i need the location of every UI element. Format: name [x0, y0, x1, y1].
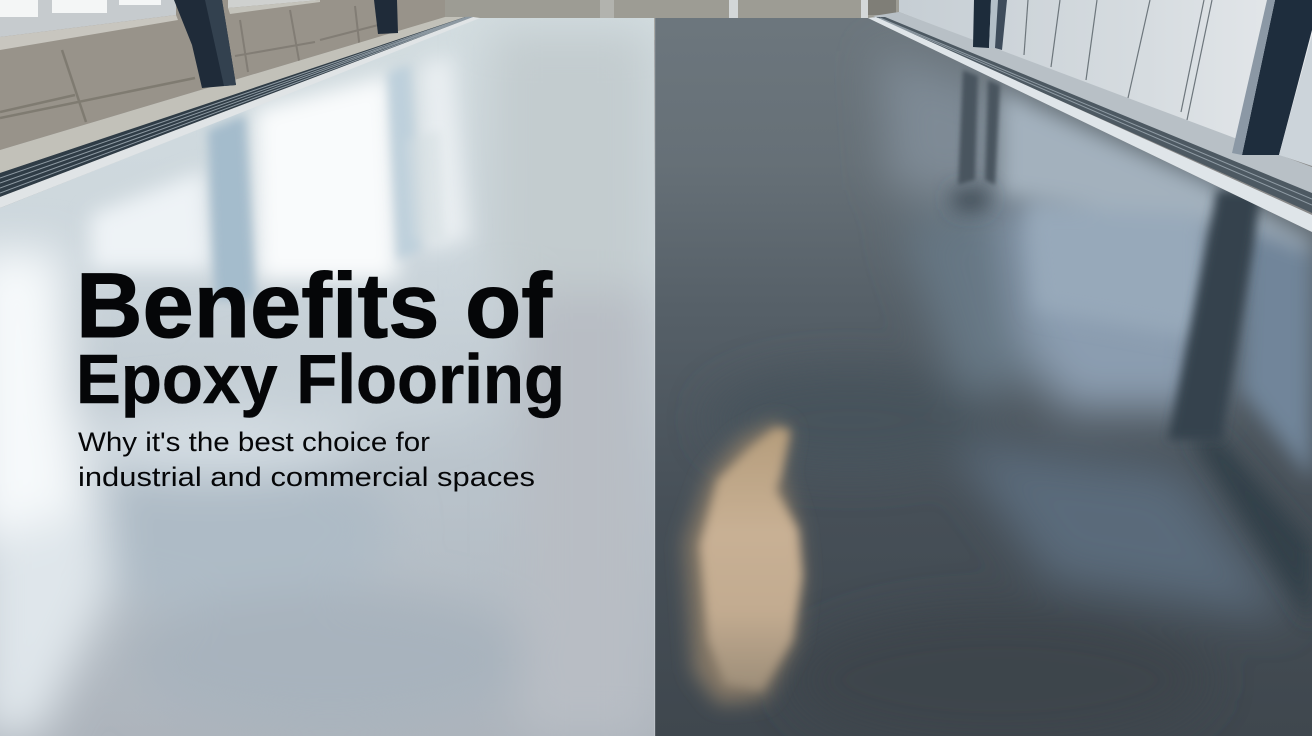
subtitle: Why it's the best choice for — [78, 427, 430, 457]
background wall: concrete back wall — [0, 0, 1312, 40]
right floor drain strip — [868, 17, 1312, 232]
right floor: dark grey epoxy with reflections — [650, 0, 1312, 736]
right wall: white panels and steel columns — [873, 0, 1312, 195]
center seam between floors — [654, 18, 656, 736]
left wall: windows, concrete and steel columns — [0, 0, 473, 173]
title: Benefits of Epoxy Flooring: Benefits of — [76, 255, 552, 357]
subtitle: industrial and commercial spaces — [78, 462, 535, 492]
title: Benefits of Epoxy Flooring: Epoxy Flooring — [76, 340, 565, 418]
left floor: white epoxy with reflections — [0, 0, 660, 736]
warm light reflection on dark floor — [685, 422, 802, 704]
title: Benefits of Epoxy Flooring — [76, 255, 565, 418]
subtitle — [78, 427, 535, 492]
left floor drain strip — [0, 17, 480, 208]
